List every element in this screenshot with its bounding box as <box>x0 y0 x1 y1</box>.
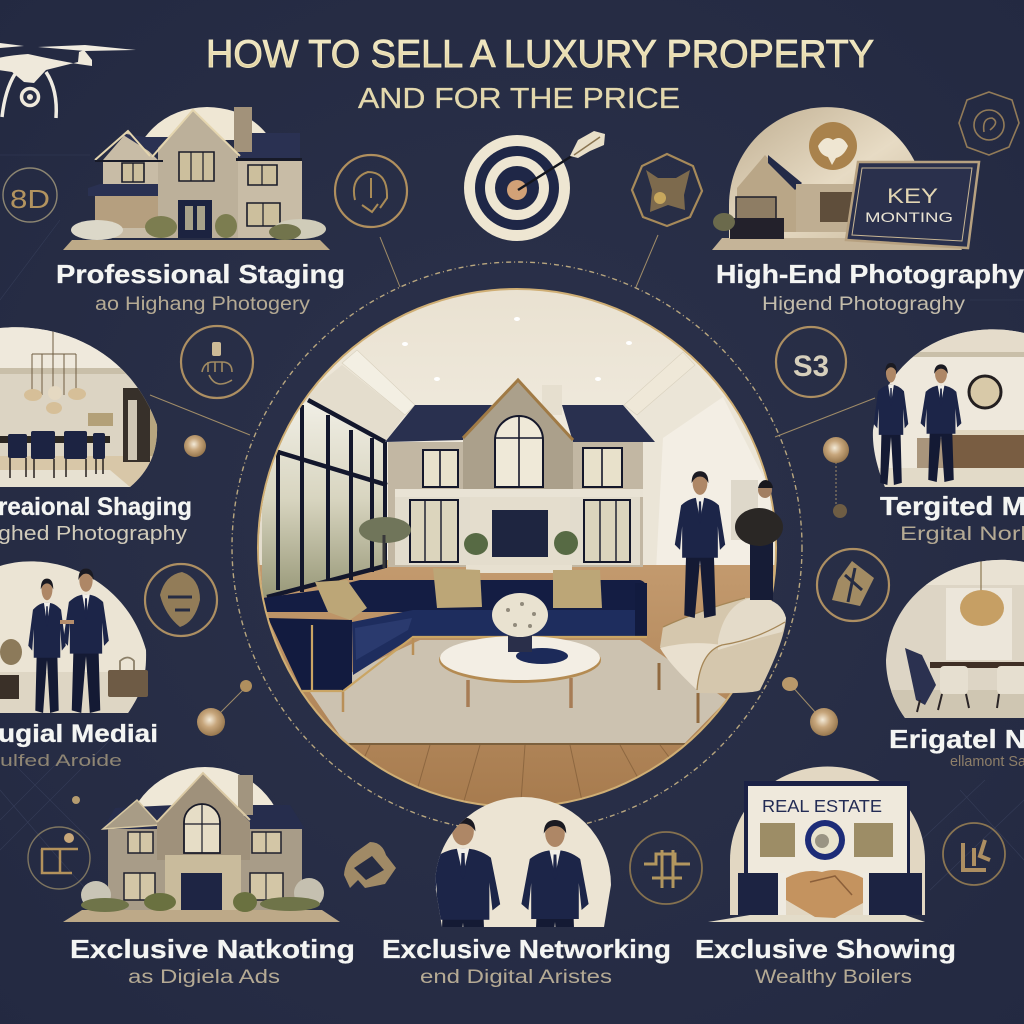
icon: 8D badge: 8D <box>10 184 50 214</box>
scene <box>426 790 620 991</box>
panel: professional staging <box>56 107 345 315</box>
lower windows <box>410 500 630 562</box>
floor <box>250 565 790 815</box>
heading: Exclusive Natkoting <box>70 934 355 964</box>
heading: Tergited M <box>880 491 1024 521</box>
subheading: end Digital Aristes <box>420 967 612 988</box>
panel: dining room left <box>0 320 192 545</box>
dome <box>143 107 271 140</box>
icon: gold ring top left <box>335 155 407 227</box>
coffee table <box>439 593 601 708</box>
icon: dart target <box>464 131 605 241</box>
ground <box>708 915 925 922</box>
dome <box>729 107 925 240</box>
dining table and chairs <box>0 436 110 443</box>
panel: dining room right <box>886 560 1024 766</box>
subheading: ulfed Aroide <box>0 751 122 770</box>
sign board: REAL ESTATE <box>762 796 882 816</box>
handshake <box>738 870 922 918</box>
doorway <box>123 388 150 462</box>
fireplace <box>470 497 570 565</box>
icon: 8D badge <box>3 168 57 222</box>
round mirror <box>969 376 1001 408</box>
two men shaking hands <box>28 579 66 713</box>
house <box>81 773 324 912</box>
dome <box>125 767 285 845</box>
subheading: as Digiela Ads <box>128 967 280 988</box>
subheading: Wealthy Boilers <box>755 967 912 988</box>
sofa <box>260 580 647 712</box>
heading: High-End Photography <box>716 259 1024 289</box>
ground <box>712 238 962 250</box>
dome <box>730 767 925 915</box>
scene <box>0 561 146 713</box>
house facade <box>359 380 655 573</box>
decorative gold pearls <box>72 435 849 804</box>
ground <box>63 910 340 922</box>
icon: gold ring bottom centre <box>630 832 702 904</box>
ground <box>63 240 330 250</box>
chandelier <box>24 328 86 414</box>
house <box>71 107 326 240</box>
vase and flowers <box>508 635 532 652</box>
house <box>713 155 860 239</box>
icon: polygon far right <box>959 92 1019 155</box>
left and right blue roofs <box>385 405 492 442</box>
second person with bouquet <box>731 480 783 600</box>
sign <box>846 162 979 248</box>
gold medal <box>809 122 857 170</box>
counter <box>917 438 944 468</box>
two men in suits <box>874 363 908 485</box>
arched window <box>495 416 543 487</box>
sign board <box>744 781 910 886</box>
heading: Professional Staging <box>56 259 345 289</box>
subheading: Higend Photograghy <box>762 294 966 315</box>
sign: KEY <box>887 185 938 208</box>
sign: MONTING <box>865 209 953 225</box>
scene <box>886 560 1024 718</box>
icon: S3 badge: S3 <box>793 350 829 383</box>
icon: thin ring bottom left <box>28 827 90 889</box>
table and chairs <box>930 662 1024 668</box>
plants <box>359 517 411 543</box>
heading: reaional Shaging <box>0 493 192 521</box>
man left <box>426 817 500 991</box>
subheading: ghed Photography <box>0 523 187 545</box>
tray <box>516 648 568 664</box>
recessed lights <box>402 317 632 381</box>
panel: targeted marketing <box>865 320 1024 545</box>
chandelier <box>980 562 982 590</box>
panel: exclusive networking people <box>382 790 671 991</box>
heading: Erigatel N <box>889 724 1024 754</box>
rug <box>310 640 727 743</box>
title line 1: HOW TO SELL A LUXURY PROPERTY <box>206 33 874 76</box>
icon: drone <box>0 43 136 118</box>
right cornice <box>624 352 695 415</box>
panel: central living room <box>250 280 790 815</box>
icon: knot <box>344 842 396 888</box>
dotted outer ring <box>232 262 802 832</box>
windows <box>262 400 387 597</box>
panel: exclusive showing <box>695 767 956 988</box>
icon: S3 badge <box>776 327 846 397</box>
icon: gold ring bottom right <box>943 823 1005 885</box>
icon: hexagon ring top right <box>632 154 702 226</box>
briefcase <box>108 658 148 697</box>
subheading: ao Highang Photogery <box>95 294 311 315</box>
sculpture <box>0 639 22 665</box>
title line 2: AND FOR THE PRICE <box>358 83 680 115</box>
ceiling <box>250 280 790 560</box>
bushes <box>71 220 123 240</box>
chimney <box>542 385 562 415</box>
connector lines <box>150 235 875 722</box>
pillows <box>315 580 367 620</box>
icon: gold ring left middle <box>181 326 253 398</box>
heading: ugial Mediai <box>0 720 158 748</box>
main gable <box>463 380 573 492</box>
icon: gold ring right lower <box>817 549 889 621</box>
panel: digital media handshake <box>0 550 158 770</box>
gold frame <box>257 288 777 808</box>
side windows <box>423 448 622 487</box>
heading: Exclusive Networking <box>382 934 671 964</box>
scene <box>0 327 158 487</box>
right wall <box>643 406 775 579</box>
panel: exclusive networking house <box>63 767 355 988</box>
scene <box>872 329 1024 487</box>
title <box>206 33 874 115</box>
armchair <box>659 598 786 723</box>
left wall <box>250 365 405 600</box>
left cornice <box>342 350 415 415</box>
standing agent <box>675 471 725 618</box>
heading: Exclusive Showing <box>695 934 956 964</box>
artwork <box>88 413 113 426</box>
subheading: Ergital Norl <box>900 524 1024 545</box>
panel: high-end photography <box>712 107 1024 315</box>
icon: gold ring left lower <box>145 564 217 636</box>
man right <box>521 820 589 988</box>
